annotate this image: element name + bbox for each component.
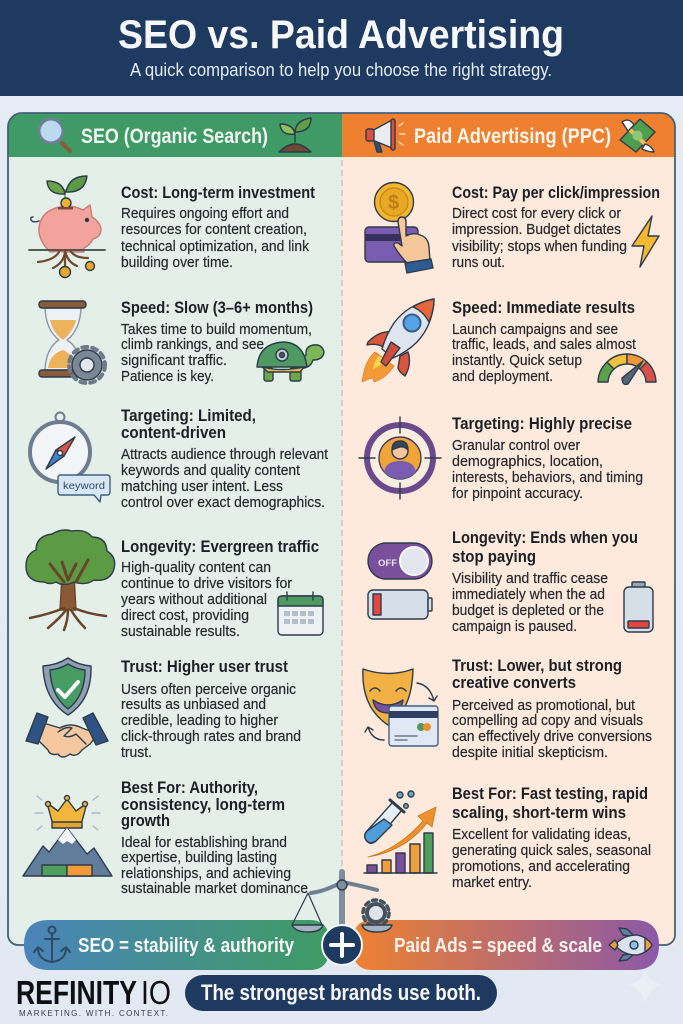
body text: Direct cost for every click or xyxy=(452,206,621,222)
icon: shield with check xyxy=(43,658,91,715)
icon: coin and card tap xyxy=(365,182,433,273)
body text xyxy=(452,698,652,761)
body text: sustainable market dominance xyxy=(121,881,308,897)
column heading: Paid: Paid Advertising (PPC) xyxy=(414,125,611,148)
body text: matching user intent. Less xyxy=(121,479,283,495)
heading: Targeting: Highly precise xyxy=(452,415,632,433)
heading: Best For: Authority, xyxy=(121,779,258,797)
item: Paid trust xyxy=(363,657,652,761)
icon: plus badge xyxy=(322,925,362,965)
icon: empty battery vertical xyxy=(624,582,653,632)
icon: tree xyxy=(26,530,115,630)
body text: promotions, and accelerating xyxy=(452,859,630,875)
heading xyxy=(452,657,622,692)
body text: Perceived as promotional, but xyxy=(452,698,635,714)
heading: Best For: Fast testing, rapid xyxy=(452,785,648,803)
body text: visibility; stops when funding xyxy=(452,239,627,255)
body text: technical optimization, and link xyxy=(121,239,310,255)
icon: empty battery horizontal xyxy=(368,590,432,619)
body text xyxy=(121,447,328,511)
body text: demographics, location, xyxy=(452,454,603,470)
item: SEO targeting xyxy=(30,407,328,511)
body text xyxy=(121,560,292,640)
body text: despite initial skepticism. xyxy=(452,745,608,761)
body text: compelling ad copy and visuals xyxy=(452,713,643,729)
text: SEO = stability & authority xyxy=(78,935,295,957)
body text: direct cost, providing xyxy=(121,608,249,624)
body text: years without additional xyxy=(121,592,267,608)
icon: megaphone xyxy=(366,119,405,152)
heading: content-driven xyxy=(121,424,226,442)
icon: off toggle: OFF xyxy=(378,558,397,569)
body text: Requires ongoing effort and xyxy=(121,206,289,222)
body text: Launch campaigns and see xyxy=(452,322,618,338)
body text xyxy=(452,571,608,635)
pill: Paid summary xyxy=(352,920,659,970)
body text: relationships, and achieving xyxy=(121,866,291,882)
body text: climb rankings, and see xyxy=(121,337,264,353)
icon: lightning xyxy=(632,216,659,267)
body text: Ideal for establishing brand xyxy=(121,835,287,851)
body text: for pinpoint accuracy. xyxy=(452,486,583,502)
heading xyxy=(121,407,256,442)
header band xyxy=(0,0,683,96)
body text: expertise, building lasting xyxy=(121,850,277,866)
body text xyxy=(121,322,312,385)
heading: growth xyxy=(121,812,170,830)
item: SEO cost xyxy=(29,176,315,278)
heading: Speed: Slow (3–6+ months) xyxy=(121,299,313,317)
body text: keywords and quality content xyxy=(121,463,300,479)
body text: interests, behaviors, and timing xyxy=(452,470,643,486)
body text: Takes time to build momentum, xyxy=(121,322,312,338)
icon: off toggle xyxy=(368,543,432,579)
panel: Paid column xyxy=(342,113,675,945)
icon: magnifier xyxy=(39,119,70,151)
icon: compass with keyword bubble xyxy=(30,412,110,502)
title: SEO vs. Paid Advertising xyxy=(118,13,564,57)
pill: SEO summary xyxy=(24,920,330,970)
body text: Visibility and traffic cease xyxy=(452,571,608,587)
heading xyxy=(121,779,285,830)
item: SEO best for xyxy=(23,779,308,897)
heading: creative converts xyxy=(452,674,576,692)
body text: instantly. Quick setup xyxy=(452,353,582,369)
body text xyxy=(121,206,310,271)
text: Paid Ads = speed & scale xyxy=(394,935,602,957)
item: SEO speed xyxy=(39,299,324,385)
heading: Trust: Higher user trust xyxy=(121,658,288,676)
body text xyxy=(452,206,627,271)
heading: Cost: Long-term investment xyxy=(121,184,315,202)
tagline: MARKETING. WITH. CONTEXT. xyxy=(19,1009,168,1018)
body text: impression. Budget dictates xyxy=(452,222,621,238)
body text: Excellent for validating ideas, xyxy=(452,827,631,843)
body text: results as unbiased and xyxy=(121,697,266,713)
item: Paid targeting xyxy=(359,415,643,502)
icon: sprout xyxy=(279,118,311,152)
body text xyxy=(121,835,308,897)
icon: rocket xyxy=(362,299,434,382)
body text: High-quality content can xyxy=(121,560,271,576)
panel: SEO column xyxy=(8,113,342,945)
body text: significant traffic. xyxy=(121,353,227,369)
heading: stop paying xyxy=(452,548,536,566)
icon: mask and card xyxy=(363,669,438,746)
body text: runs out. xyxy=(452,255,505,271)
heading: Trust: Lower, but strong xyxy=(452,657,622,675)
item: SEO trust xyxy=(26,658,301,761)
body text: continue to drive visitors for xyxy=(121,576,292,592)
heading: scaling, short-term wins xyxy=(452,804,626,822)
icon: handshake xyxy=(26,713,108,757)
icon: compass with keyword bubble: keyword xyxy=(63,480,105,492)
body text: campaign is paused. xyxy=(452,619,577,635)
icon: balance scale xyxy=(292,872,392,932)
icon: test tube and growth chart xyxy=(364,791,437,873)
body text: trust. xyxy=(121,745,152,761)
item: Paid longevity xyxy=(368,529,653,635)
icon: calendar xyxy=(278,592,323,635)
icon: anchor xyxy=(34,926,70,962)
body text: resources for content creation, xyxy=(121,222,307,238)
heading xyxy=(452,785,648,822)
body text: generating quick sales, seasonal xyxy=(452,843,651,859)
item: Paid speed xyxy=(362,299,656,385)
body text: budget is depleted or the xyxy=(452,603,604,619)
body text: can effectively drive conversions xyxy=(452,729,652,745)
heading: Speed: Immediate results xyxy=(452,299,635,317)
body text: click-through rates and brand xyxy=(121,729,301,745)
body text: market entry. xyxy=(452,875,532,891)
body text: Attracts audience through relevant xyxy=(121,447,328,463)
body text: immediately when the ad xyxy=(452,587,605,603)
body text: control over exact demographics. xyxy=(121,495,325,511)
body text: sustainable results. xyxy=(121,624,240,640)
heading: Longevity: Evergreen traffic xyxy=(121,538,319,556)
body text xyxy=(121,682,301,761)
body text: building over time. xyxy=(121,255,233,271)
item: SEO longevity xyxy=(26,530,323,640)
subtitle: A quick comparison to help you choose the right strategy. xyxy=(130,59,552,80)
icon: sparkle xyxy=(627,969,663,1003)
callout: closing statement: The strongest brands use both. xyxy=(201,980,481,1005)
heading: Targeting: Limited, xyxy=(121,407,256,425)
body text xyxy=(452,827,651,891)
logo: REFINITY xyxy=(16,974,137,1011)
icon: piggy bank xyxy=(29,176,105,278)
icon: flying money xyxy=(620,119,655,152)
heading: Longevity: Ends when you xyxy=(452,529,638,547)
icon: target with person xyxy=(359,417,441,499)
body text: Patience is key. xyxy=(121,369,214,385)
logo: IO xyxy=(141,974,171,1011)
icon: speed gauge xyxy=(598,354,656,384)
body text: credible, leading to higher xyxy=(121,713,278,729)
item: Paid cost xyxy=(365,182,660,273)
body text: Granular control over xyxy=(452,438,580,454)
item: Paid best for xyxy=(364,785,651,891)
icon: coin and card tap: $ xyxy=(388,192,399,214)
callout: closing statement xyxy=(185,975,497,1011)
heading xyxy=(452,529,638,566)
body text: traffic, leads, and sales almost xyxy=(452,337,636,353)
body text xyxy=(452,438,643,502)
body text: and deployment. xyxy=(452,369,553,385)
icon: crown on mountain xyxy=(23,796,112,876)
column heading: SEO: SEO (Organic Search) xyxy=(81,125,268,148)
body text xyxy=(452,322,636,385)
body text: Users often perceive organic xyxy=(121,682,296,698)
heading: consistency, long-term xyxy=(121,796,285,814)
icon: hourglass with gear xyxy=(39,301,105,383)
icon: small rocket xyxy=(609,928,652,961)
icon: turtle xyxy=(257,342,324,381)
